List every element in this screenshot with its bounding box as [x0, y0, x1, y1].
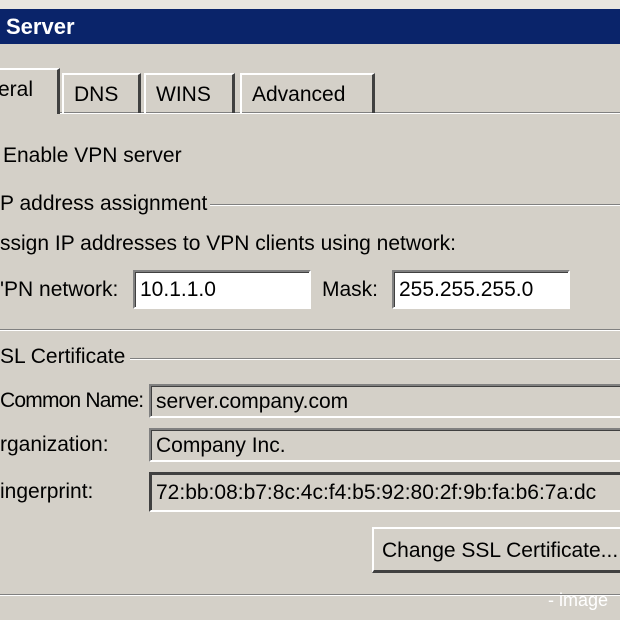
- VPN network field: 'PN network:: [0, 278, 118, 301]
- common name row: Common Name:: [0, 389, 143, 412]
- tab panel border: [0, 112, 620, 114]
- fingerprint row: 72:bb:08:b7:8c:4c:f4:b5:92:80:2f:9b:fa:b6:7a:dc: [156, 481, 596, 504]
- tab: General: [0, 68, 60, 114]
- organization row: [0, 428, 620, 462]
- VPN network field: Mask:: [322, 278, 378, 301]
- tab: Advanced: [240, 73, 375, 113]
- common name row: [0, 384, 620, 418]
- tab: DNS: [62, 73, 141, 113]
- fingerprint row: ingerprint:: [0, 480, 93, 503]
- checkbox label: Enable VPN server: [3, 144, 182, 167]
- top strip: [0, 0, 620, 9]
- VPN network field: 10.1.1.0: [140, 278, 216, 301]
- title bar: [0, 9, 620, 44]
- organization row: rganization:: [0, 433, 109, 456]
- tab: DNS: DNS: [74, 83, 118, 106]
- tab: WINS: WINS: [156, 83, 211, 106]
- button: Change SSL Certificate: Change SSL Certificate...: [382, 539, 618, 562]
- tab: WINS: [144, 73, 235, 113]
- organization row: Company Inc.: [156, 434, 286, 457]
- group heading: SSL: SL Certificate: [0, 345, 125, 368]
- watermark: - image: [548, 590, 608, 610]
- VPN network field: 255.255.255.0: [399, 278, 533, 301]
- instruction text: ssign IP addresses to VPN clients using network:: [0, 232, 456, 255]
- group heading: IP: P address assignment: [0, 192, 207, 215]
- common name row: server.company.com: [156, 390, 348, 413]
- VPN network field: [0, 270, 570, 309]
- button: Change SSL Certificate: [372, 527, 620, 573]
- tab: Advanced: Advanced: [252, 83, 345, 106]
- title bar: Server: [6, 14, 75, 39]
- fingerprint row: [0, 472, 620, 512]
